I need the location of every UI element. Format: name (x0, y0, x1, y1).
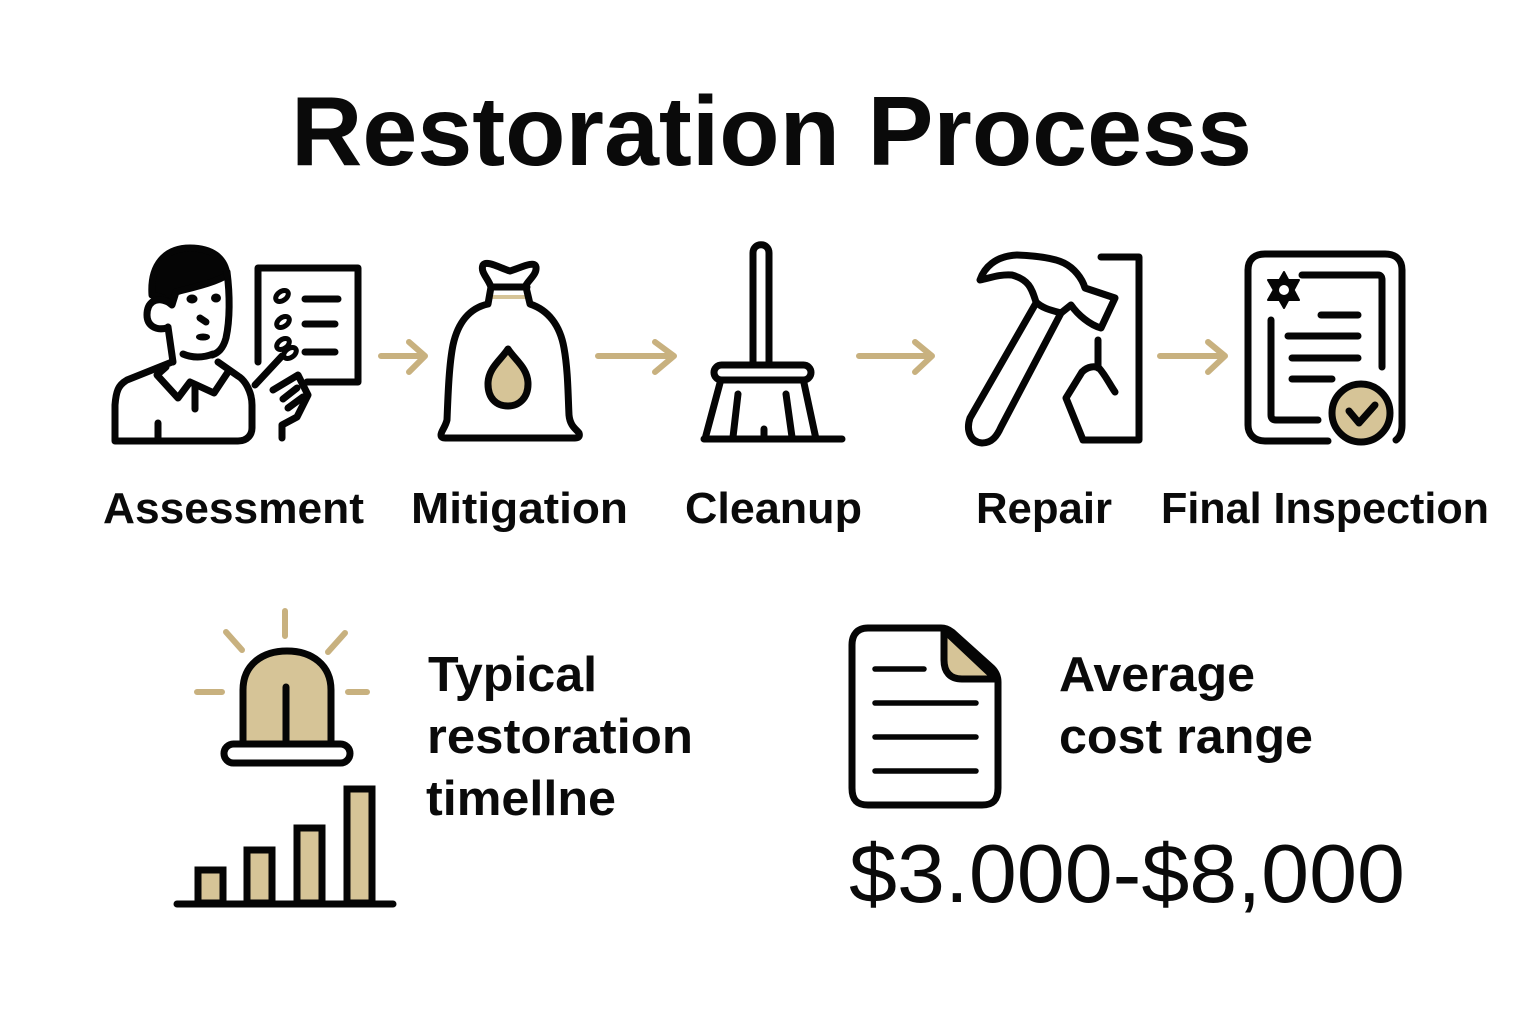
icon: alarm beacon (197, 611, 367, 763)
title: Restoration Process (291, 76, 1252, 186)
arrow: repair to final inspection (1160, 342, 1225, 372)
text: typical restoration timeline: restoration (427, 710, 693, 764)
arrow: mitigation to cleanup (598, 342, 674, 372)
icon: repair hammer (968, 255, 1139, 443)
icon: cleanup broom (704, 245, 842, 439)
label: Final Inspection: Final Inspection (1161, 484, 1489, 533)
text: average cost range (1059, 648, 1313, 764)
label: Mitigation: Mitigation (411, 484, 628, 533)
label: Repair: Repair (976, 484, 1112, 533)
icon: assessment person with checklist (115, 248, 358, 441)
text: average cost range: Average (1059, 648, 1255, 702)
icon: final inspection certificate (1248, 254, 1402, 442)
label: Cleanup: Cleanup (685, 484, 862, 533)
arrow: cleanup to repair (859, 342, 932, 372)
text: average cost range: cost range (1059, 710, 1313, 764)
cost figure: $3.000-$8,000 (849, 827, 1405, 920)
text: typical restoration timeline (426, 648, 693, 826)
icon: mitigation sack with drop (441, 263, 579, 438)
text: typical restoration timeline: timellne (426, 772, 616, 826)
label: Assessment: Assessment (103, 484, 364, 533)
bar chart: timeline (177, 789, 393, 904)
icon: cost document (852, 628, 998, 805)
text: typical restoration timeline: Typical (428, 648, 597, 702)
arrow: assessment to mitigation (381, 342, 425, 372)
